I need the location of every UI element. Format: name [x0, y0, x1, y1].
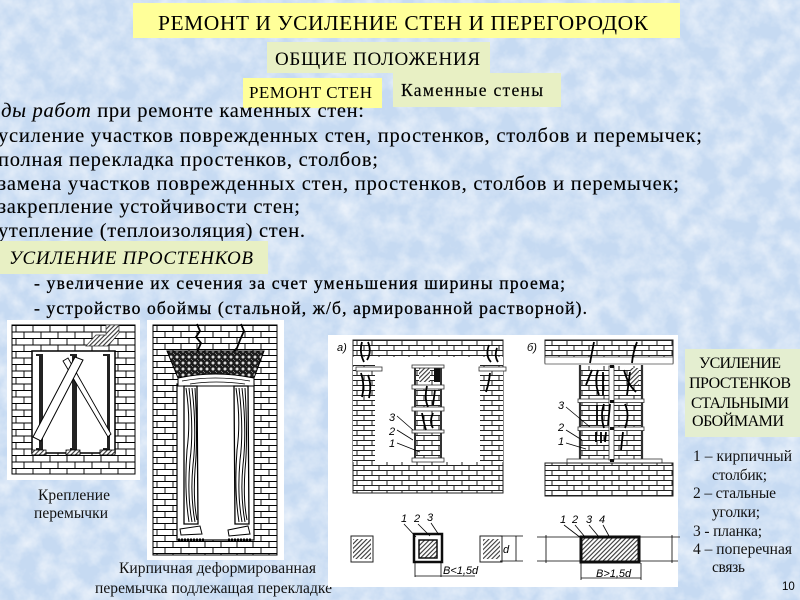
panel: jacket heading: УСИЛЕНИЕ	[699, 355, 781, 372]
base blocks	[32, 450, 115, 455]
legend: 1 – кирпичный	[693, 448, 792, 465]
section a: 2	[413, 513, 420, 525]
section b: 2	[571, 514, 578, 526]
drawing b numbers: 2	[557, 422, 564, 434]
text block: types of repair work: полная перекладка простенков, столбов;	[0, 149, 378, 171]
section a: B<1,5d	[443, 565, 479, 577]
figure: steel jacket drawings	[328, 335, 680, 587]
legend: 3 - планка;	[693, 523, 762, 540]
drawing b numbers	[557, 400, 590, 449]
heading: general provisions: ОБЩИЕ ПОЛОЖЕНИЯ	[275, 49, 480, 70]
panel: jacket heading	[685, 349, 800, 437]
page number: 10	[782, 581, 795, 593]
heading: wall repair	[243, 78, 382, 108]
section a: d	[503, 544, 510, 556]
crack patch	[86, 325, 119, 346]
title	[133, 3, 680, 38]
legend: 2 – стальные	[693, 485, 776, 502]
heading: strengthening piers: УСИЛЕНИЕ ПРОСТЕНКОВ	[9, 248, 253, 269]
section b: B>1,5d	[596, 568, 632, 580]
text block: strengthening methods: - увеличение их сечения за счет уменьшения ширины проема;	[34, 273, 565, 293]
cracks	[196, 324, 244, 352]
drawing a: narrow pier	[337, 340, 506, 493]
drawing a numbers: 1	[389, 438, 395, 450]
text block: types of repair work: усиление участков поврежденных стен, простенков, столбов и перемычек;	[0, 125, 702, 147]
caption: lintel bracing: Крепление	[38, 487, 110, 504]
section a: 1	[401, 513, 407, 525]
deformed arch	[167, 351, 264, 378]
drawing b: wide pier	[527, 340, 673, 496]
figure: lintel bracing	[7, 320, 140, 480]
section b: 3	[586, 514, 593, 526]
heading: masonry walls	[393, 73, 561, 107]
heading: masonry walls: Каменные стены	[401, 80, 543, 100]
drawing a numbers	[388, 412, 420, 452]
legend: столбик;	[712, 467, 767, 484]
text block: types of repair work: утепление (теплоизоляция) стен.	[0, 220, 305, 242]
panel: jacket heading: ОБОЙМАМИ	[692, 411, 784, 430]
caption: deformed lintel: перемычка подлежащая перекладке	[95, 580, 332, 597]
text block: types of repair work: закрепление устойчивости стен;	[0, 196, 300, 218]
legend	[693, 448, 792, 576]
panel: jacket heading: СТАЛЬНЫМИ	[691, 395, 789, 412]
panel: jacket heading: ПРОСТЕНКОВ	[689, 375, 791, 392]
heading: strengthening piers	[0, 241, 268, 274]
drawing b numbers: 3	[558, 400, 565, 412]
drawing a: narrow pier: а)	[337, 342, 347, 354]
drawing b: wide pier: б)	[527, 342, 537, 354]
caption: lintel bracing: перемычки	[34, 505, 108, 522]
section b	[537, 514, 680, 580]
wedges	[180, 526, 250, 536]
heading: wall repair: РЕМОНТ СТЕН	[249, 83, 372, 102]
posts	[36, 354, 110, 450]
heading: general provisions	[267, 42, 490, 73]
title: РЕМОНТ И УСИЛЕНИЕ СТЕН И ПЕРЕГОРОДОК	[158, 11, 649, 35]
legend: уголки;	[712, 504, 760, 521]
drawing b numbers: 1	[558, 436, 564, 448]
figure: deformed brick lintel	[147, 320, 284, 560]
caption: deformed lintel: Кирпичная деформированная	[119, 560, 316, 577]
wooden posts	[184, 386, 249, 524]
text block: types of repair work: замена участков поврежденных стен, простенков, столбов и перемычек;	[0, 173, 679, 195]
section b: 4	[599, 514, 605, 526]
legend: связь	[712, 559, 745, 576]
caption: deformed lintel	[95, 560, 332, 597]
caption: lintel bracing	[34, 487, 110, 522]
beam	[178, 374, 254, 386]
text block: strengthening methods: - устройство обоймы (стальной, ж/б, армированной растворной).	[34, 298, 587, 318]
text block: strengthening methods	[34, 273, 587, 318]
legend: 4 – поперечная	[693, 541, 792, 558]
drawing a numbers: 2	[388, 426, 395, 438]
cracks	[361, 342, 498, 430]
text block: types of repair work	[0, 100, 702, 242]
diagonal braces	[33, 357, 111, 441]
drawing a numbers: 3	[389, 412, 396, 424]
section a	[351, 512, 523, 577]
section a: 3	[427, 512, 434, 524]
section b: 1	[560, 514, 566, 526]
cracks	[586, 342, 637, 450]
